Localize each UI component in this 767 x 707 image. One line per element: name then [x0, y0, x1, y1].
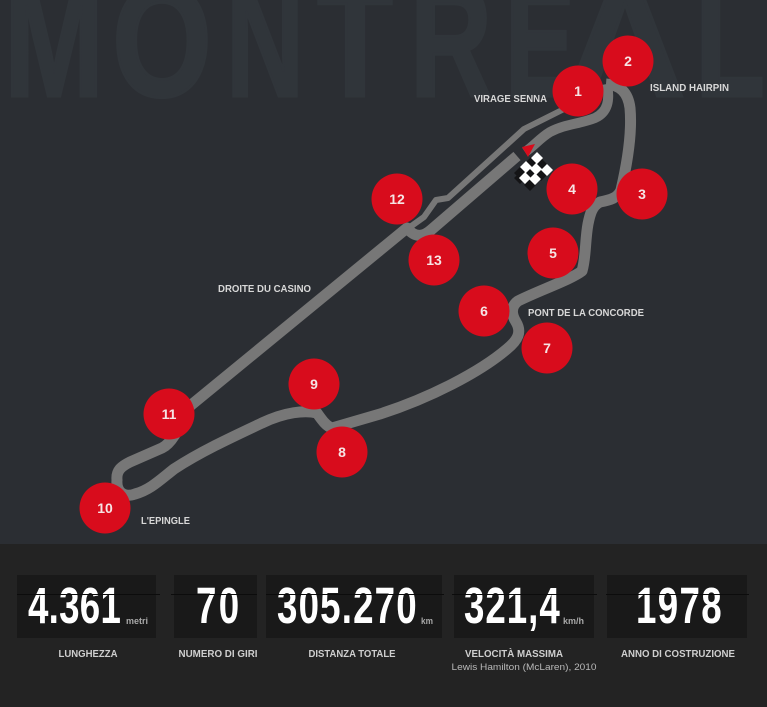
- stat: numero di giri: 70: [196, 578, 239, 634]
- corner labels: [141, 83, 729, 527]
- stat: lunghezza: LUNGHEZZA: [58, 649, 118, 660]
- stat: lunghezza: [17, 575, 156, 660]
- corner labels: L'EPINGLE: [141, 516, 190, 527]
- stat: anno di costruzione: ANNO DI COSTRUZIONE: [621, 649, 735, 660]
- stat: lunghezza: metri: [126, 616, 148, 626]
- stat: numero di giri: [174, 575, 258, 660]
- turn numbers: 10: [97, 500, 113, 516]
- corner labels: PONT DE LA CONCORDE: [528, 308, 644, 319]
- turn numbers: 11: [162, 406, 177, 422]
- stat: numero di giri: NUMERO DI GIRI: [178, 649, 258, 660]
- turn numbers: 13: [426, 252, 442, 268]
- turn numbers: 1: [574, 83, 582, 99]
- turn numbers: 12: [389, 191, 405, 207]
- stat: velocita massima: Lewis Hamilton (McLaren), 2010: [452, 662, 596, 673]
- stat: velocita massima: [452, 575, 596, 673]
- checkered flag icon: [514, 152, 553, 191]
- stat: anno di costruzione: 1978: [636, 578, 722, 634]
- stat: distanza totale: [266, 575, 442, 660]
- stat: anno di costruzione: [607, 575, 747, 660]
- stat: velocita massima: km/h: [563, 616, 584, 626]
- turn numbers: 7: [543, 340, 551, 356]
- stat: distanza totale: 305.270: [277, 578, 417, 634]
- turn numbers: 5: [549, 245, 557, 261]
- turn numbers: [97, 53, 646, 516]
- turn numbers: 6: [480, 303, 488, 319]
- turn numbers: 8: [338, 444, 346, 460]
- start line flag: [522, 144, 535, 157]
- turn numbers: 4: [568, 181, 576, 197]
- turn numbers: 9: [310, 376, 318, 392]
- corner labels: ISLAND HAIRPIN: [650, 83, 729, 94]
- circuit track: [117, 84, 631, 495]
- corner labels: DROITE DU CASINO: [218, 284, 311, 295]
- stat: distanza totale: km: [421, 616, 433, 626]
- turn numbers: 2: [624, 53, 632, 69]
- corner labels: VIRAGE SENNA: [474, 94, 547, 105]
- turn numbers: 3: [638, 186, 646, 202]
- stats panel: [0, 544, 767, 707]
- turn markers: [80, 36, 668, 534]
- stat: velocita massima: 321,4: [464, 578, 560, 634]
- title: MONTREAL: [4, 0, 765, 130]
- stat: distanza totale: DISTANZA TOTALE: [308, 649, 396, 660]
- stat: velocita massima: VELOCITÀ MASSIMA: [465, 647, 563, 660]
- stat: lunghezza: 4.361: [28, 578, 121, 634]
